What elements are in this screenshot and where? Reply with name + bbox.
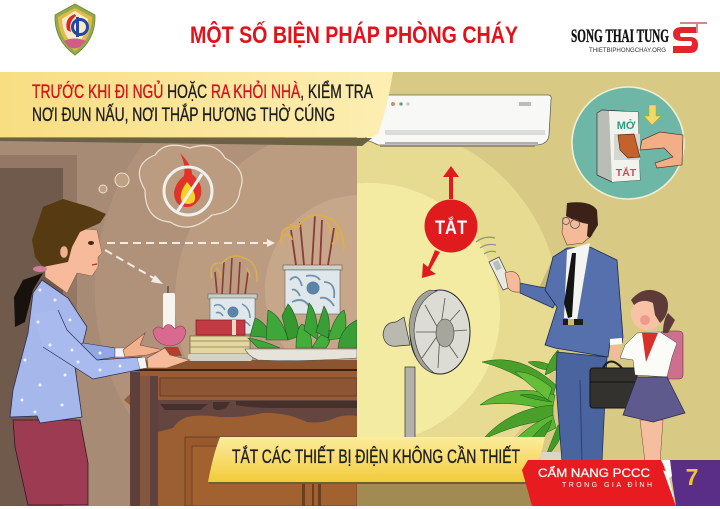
ponytail — [14, 273, 43, 327]
shirt — [620, 332, 677, 377]
plant — [480, 350, 560, 452]
near arm outlines — [43, 310, 147, 379]
girl — [620, 290, 685, 462]
paper stack and red box on tray — [188, 320, 252, 361]
red scarf — [642, 333, 658, 362]
logo: shield emblem — [55, 4, 95, 55]
icon: red TẮT circle with arrows — [422, 166, 478, 278]
logo: Song Thai Tung: THIETBIPHONGCHAY.ORG — [589, 47, 666, 54]
banner text line 2: NƠI ĐUN NẤU, NƠI THẮP HƯƠNG THỜ CÚNG — [32, 102, 335, 126]
icon: wall switch in circle: TẮT — [616, 166, 637, 179]
head — [631, 298, 663, 330]
man with remote — [489, 202, 623, 462]
top banner — [0, 72, 393, 146]
tie — [564, 253, 576, 318]
incense pot large — [281, 215, 344, 314]
blouse — [10, 280, 87, 423]
neck and face — [45, 228, 102, 293]
floor band — [357, 478, 537, 506]
blouse polka dots — [20, 288, 122, 414]
panel: left scene (altar room) — [0, 137, 357, 506]
bottom banner — [208, 437, 545, 484]
woman — [10, 199, 190, 505]
handbook subtitle: TRONG GIA ĐÌNH — [562, 480, 652, 489]
jacket — [545, 247, 623, 357]
logo: Song Thai Tung — [571, 22, 707, 54]
icon: wall switch in circle — [572, 87, 684, 199]
cuff — [610, 338, 622, 345]
bottom banner text: TẮT CÁC THIẾT BỊ ĐIỆN KHÔNG CẦN THIẾT — [232, 446, 520, 468]
door frame — [0, 155, 77, 506]
altar table — [124, 360, 357, 506]
ponytail — [663, 313, 675, 333]
footer tag: page number — [661, 460, 720, 506]
handbook title: CẨM NANG PCCC — [538, 467, 650, 480]
legs — [640, 420, 663, 462]
skirt — [623, 377, 685, 422]
trousers — [556, 352, 607, 462]
near arm — [69, 344, 142, 379]
man's wall shadow — [540, 262, 556, 308]
icon: red TẮT circle with arrows: TẮT — [435, 217, 467, 239]
mouth — [92, 264, 97, 265]
footer tag: page number: 7 — [686, 464, 698, 490]
hair — [631, 290, 668, 323]
gaze arrows — [105, 239, 275, 284]
bananas on plate — [245, 303, 357, 361]
thought bubble with crossed-out flame — [99, 145, 242, 227]
title: MỘT SỐ BIỆN PHÁP PHÒNG CHÁY — [190, 21, 518, 49]
ear — [60, 246, 68, 258]
hands — [123, 333, 163, 357]
far arm — [81, 342, 116, 360]
header background — [0, 0, 720, 72]
bottom edge — [0, 506, 720, 509]
wall with glow — [357, 72, 720, 506]
eye — [88, 241, 94, 245]
incense pot small — [208, 256, 257, 334]
air conditioner — [365, 95, 551, 146]
candle on lotus — [153, 286, 186, 356]
arrow up — [443, 166, 459, 199]
hair — [32, 199, 106, 267]
hand — [505, 272, 520, 292]
icon: wall switch in circle: MỞ — [617, 119, 636, 132]
remote — [489, 257, 513, 290]
wall with glow — [0, 137, 357, 506]
panel: right scene (room) — [357, 72, 720, 506]
footer tag: red handbook label — [522, 460, 676, 506]
glasses — [562, 218, 580, 228]
banner text line 1: TRƯỚC KHI ĐI NGỦ HOẶC RA KHỎI NHÀ, KIỂM TRA — [32, 79, 373, 103]
shirt — [564, 243, 590, 320]
skirt — [13, 420, 88, 505]
signal waves — [476, 237, 496, 254]
belt — [563, 319, 583, 325]
hair — [566, 202, 598, 238]
raised arm — [520, 283, 560, 308]
arrow down — [422, 250, 440, 278]
hair tie — [33, 266, 47, 272]
head — [562, 212, 592, 245]
briefcase — [590, 362, 637, 408]
backpack — [660, 331, 683, 379]
electric fan — [383, 290, 470, 439]
